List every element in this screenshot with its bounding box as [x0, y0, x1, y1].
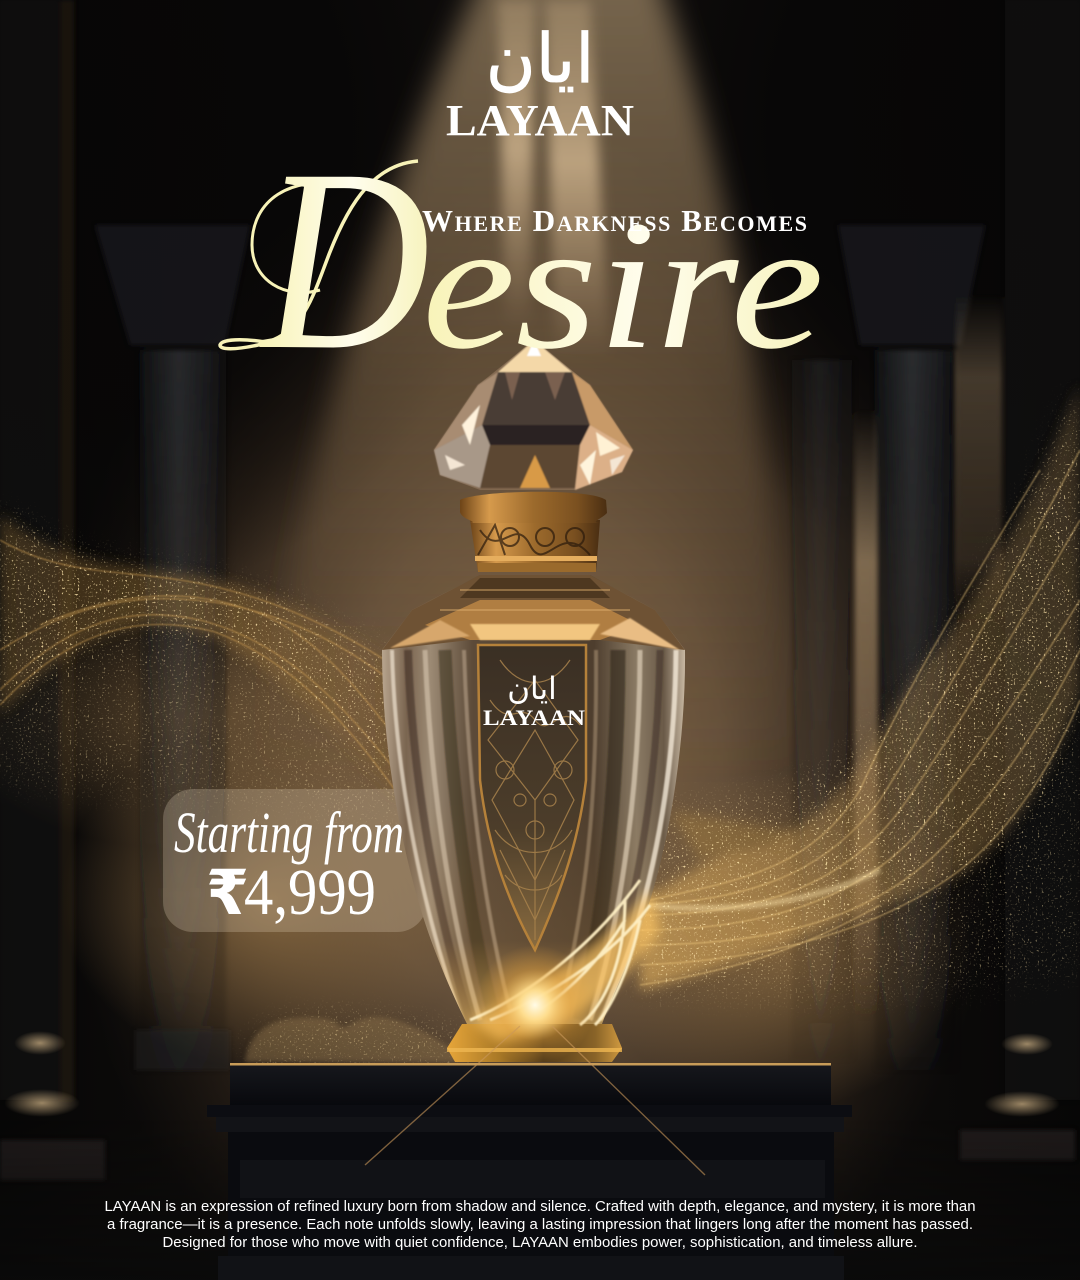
- brand logo: Arabic mark and LAYAAN wordmark: LAYAAN: [446, 96, 634, 145]
- floor lights: [0, 1031, 1080, 1280]
- brand logo: Arabic mark and LAYAAN wordmark: [446, 20, 634, 145]
- bottle: panel logo: ایان: [507, 671, 557, 707]
- light burst at base of bottle: [365, 880, 705, 1175]
- description paragraph: [104, 1199, 975, 1251]
- price badge text: ₹: [206, 859, 249, 928]
- perfume bottle: [380, 340, 690, 1062]
- gold sparkle dust: [0, 380, 1080, 1100]
- bottle: golden base: [447, 1024, 622, 1062]
- golden dust veil: right: [640, 385, 1080, 990]
- price badge: panel: [163, 789, 427, 932]
- main title: Desire: esire: [422, 183, 824, 388]
- bottle: diamond stopper: [434, 340, 633, 490]
- bottle: collar: [460, 492, 607, 523]
- description paragraph: Designed for those who move with quiet confidence, LAYAAN embodies power, sophistication, and timeless allure.: [162, 1235, 918, 1251]
- price badge text: 4,999: [244, 856, 376, 929]
- price badge text: Starting from: [174, 800, 404, 865]
- main title: Desire: D: [258, 116, 430, 404]
- brand logo: Arabic mark and LAYAAN wordmark: ایان: [486, 20, 594, 99]
- bottle: glass body: [382, 575, 685, 1030]
- golden dust veil: left: [0, 515, 400, 800]
- bottle: panel logo: [483, 671, 585, 730]
- dust mound on plinth: [245, 1017, 470, 1062]
- main title: Desire: [220, 116, 824, 404]
- columns: left colonnade: [0, 0, 250, 1180]
- columns: right colonnade: [792, 225, 1076, 1160]
- bottle: flutes and shoulder facets: [380, 575, 690, 1035]
- tagline: Where Darkness Becomes: [422, 203, 807, 238]
- description paragraph: LAYAAN is an expression of refined luxury born from shadow and silence. Crafted with depth, elegance, and mystery, it is more than: [104, 1199, 975, 1215]
- price badge text: [174, 800, 404, 929]
- bottle: panel logo: LAYAAN: [483, 705, 585, 730]
- bottle: engraved label panel: [478, 645, 586, 950]
- bottle: neck: [470, 520, 600, 572]
- plinth: [207, 1063, 852, 1280]
- description paragraph: a fragrance—it is a presence. Each note unfolds slowly, leaving a lasting impression that lingers long after the moment has passed.: [107, 1217, 973, 1233]
